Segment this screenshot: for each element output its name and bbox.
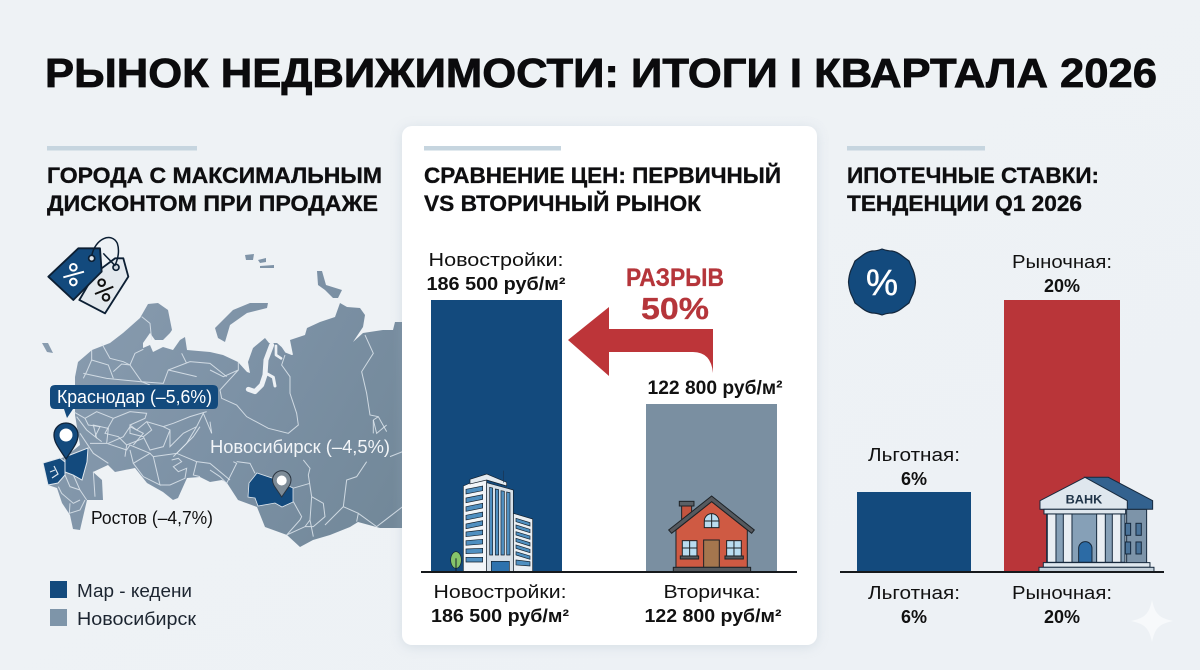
label: subsidized rate top bbox=[868, 445, 960, 489]
panel: price comparison bbox=[402, 126, 817, 647]
regional borders siberia bbox=[210, 420, 403, 537]
label: subsidized rate bottom bbox=[868, 583, 960, 627]
title: РЫНОК НЕДВИЖИМОСТИ: ИТОГИ I КВАРТАЛА 2026 bbox=[45, 50, 1157, 96]
label: secondary price top: 122 800 руб/м² bbox=[648, 378, 782, 399]
icon: sparkle bbox=[1131, 600, 1173, 642]
label: market rate top bbox=[1012, 252, 1112, 296]
label: market rate top: 20% bbox=[1044, 276, 1080, 296]
label: market rate bottom bbox=[1012, 583, 1112, 627]
heading: price comparison: VS ВТОРИЧНЫЙ РЫНОК bbox=[424, 191, 701, 216]
label: gap: РАЗРЫВ bbox=[626, 264, 724, 292]
highlighted region: Krasnodar bbox=[43, 448, 88, 485]
legend bbox=[50, 581, 196, 629]
callout: Krasnodar: Краснодар (–5,6%) bbox=[57, 387, 212, 407]
heading: mortgage rates: ТЕНДЕНЦИИ Q1 2026 bbox=[847, 191, 1082, 216]
label: new buildings bottom: 186 500 руб/м² bbox=[431, 606, 569, 626]
legend: Мар - кедени bbox=[77, 581, 192, 601]
regional borders east bbox=[210, 335, 403, 457]
panel: cities with maximum discount bbox=[42, 146, 405, 629]
heading: cities: ГОРОДА С МАКСИМАЛЬНЫМ bbox=[47, 163, 382, 188]
label: new buildings top: Новостройки: bbox=[428, 250, 564, 270]
icon: percent badge bbox=[848, 249, 916, 315]
label: gap: 50% bbox=[641, 291, 709, 326]
label: secondary bottom bbox=[644, 582, 782, 626]
label: Rostov: Ростов (–4,7%) bbox=[91, 508, 213, 528]
icon: bank bbox=[1039, 477, 1154, 572]
callout: Krasnodar bbox=[50, 385, 218, 418]
icon: discount tags bbox=[48, 238, 128, 313]
icon: percent badge: % bbox=[866, 262, 898, 303]
heading: cities: ДИСКОНТОМ ПРИ ПРОДАЖЕ bbox=[47, 191, 378, 216]
heading: price comparison: СРАВНЕНИЕ ЦЕН: ПЕРВИЧНЫЙ bbox=[424, 163, 781, 188]
panel: mortgage rates bbox=[840, 146, 1164, 627]
label: gap bbox=[626, 264, 724, 326]
heading: mortgage rates bbox=[847, 163, 1099, 216]
label: subsidized rate top: Льготная: bbox=[868, 445, 960, 465]
label: secondary bottom: Вторичка: bbox=[664, 582, 760, 602]
bar: new buildings bbox=[431, 300, 562, 572]
heading: cities bbox=[47, 163, 382, 216]
label: new buildings bottom: Новостройки: bbox=[434, 582, 566, 602]
label: new buildings top: 186 500 руб/м² bbox=[426, 274, 566, 294]
arrow: gap bbox=[568, 307, 713, 376]
icon: map pin Krasnodar bbox=[54, 423, 78, 459]
label: subsidized rate bottom: 6% bbox=[901, 607, 927, 627]
icon: brick house bbox=[669, 496, 754, 572]
label: new buildings top bbox=[426, 250, 566, 294]
icon: map pin Novosibirsk bbox=[272, 471, 291, 497]
baseline bbox=[840, 571, 1164, 573]
label: subsidized rate top: 6% bbox=[901, 469, 927, 489]
bar: market bbox=[1004, 300, 1120, 572]
bar: secondary market bbox=[646, 404, 777, 572]
label: Novosibirsk: Новосибирск (–4,5%) bbox=[210, 437, 390, 457]
baseline bbox=[421, 571, 797, 573]
label: new buildings bottom bbox=[431, 582, 569, 626]
regional borders south bbox=[58, 425, 230, 513]
label: market rate bottom: Рыночная: bbox=[1012, 583, 1112, 603]
bar: subsidized bbox=[857, 492, 971, 572]
label: market rate top: Рыночная: bbox=[1012, 252, 1112, 272]
highlighted region: Novosibirsk bbox=[248, 473, 293, 507]
icon: office building bbox=[451, 471, 533, 572]
icon: bank: BAHK bbox=[1066, 492, 1103, 506]
label: market rate bottom: 20% bbox=[1044, 607, 1080, 627]
map of Russia bbox=[42, 254, 405, 547]
label: subsidized rate bottom: Льготная: bbox=[868, 583, 960, 603]
label: secondary bottom: 122 800 руб/м² bbox=[644, 606, 782, 626]
regional borders west bbox=[73, 317, 227, 457]
Ob Gulf and bays bbox=[248, 345, 292, 392]
heading: mortgage rates: ИПОТЕЧНЫЕ СТАВКИ: bbox=[847, 163, 1099, 188]
heading: price comparison bbox=[424, 163, 781, 216]
legend: Новосибирск bbox=[77, 609, 196, 629]
